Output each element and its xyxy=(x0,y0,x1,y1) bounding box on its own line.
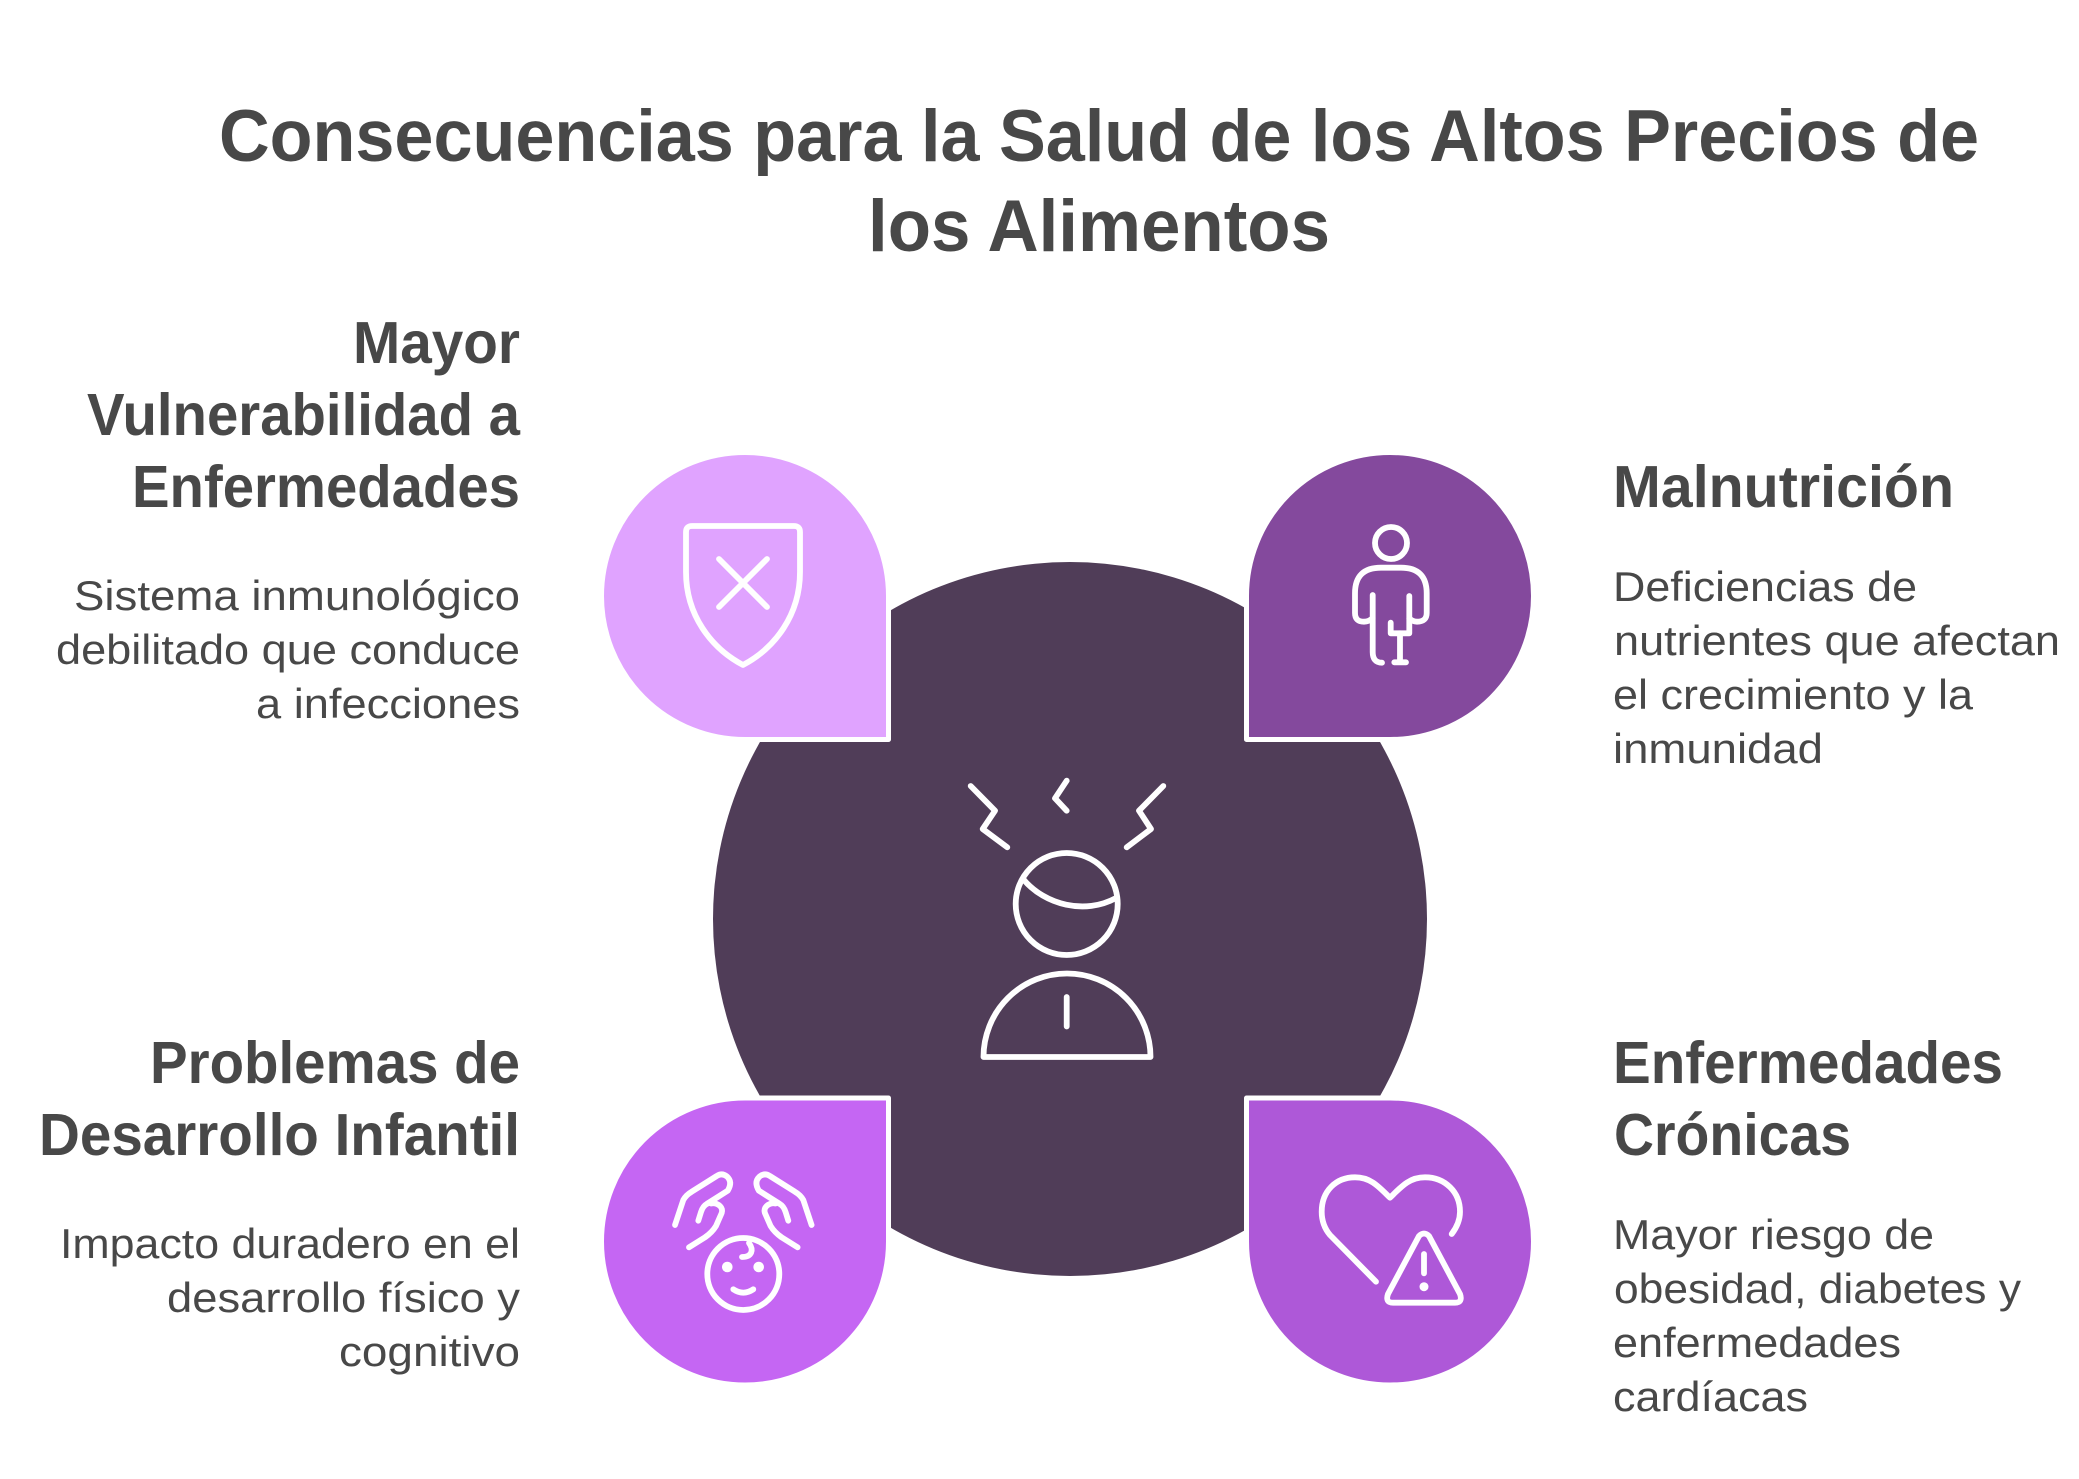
heading: Malnutrición xyxy=(1613,454,1954,520)
teardrop: deep purple xyxy=(1246,452,1534,740)
description: cardíacas xyxy=(1613,1373,1808,1420)
panel: Enfermedades Crónicas xyxy=(1246,1030,2021,1420)
description: el crecimiento y la xyxy=(1613,671,1974,718)
description: Sistema inmunológico xyxy=(74,572,520,619)
title xyxy=(219,96,1979,267)
panel: Malnutrición xyxy=(1246,452,2060,772)
description: Mayor riesgo de xyxy=(1613,1211,1934,1258)
central circle xyxy=(713,562,1427,1276)
title: Consecuencias para la Salud de los Altos Precios de xyxy=(219,96,1979,177)
icon: shield with cross xyxy=(686,526,800,665)
heading: Problemas de xyxy=(150,1030,520,1096)
heading: Enfermedades xyxy=(1613,1030,2003,1096)
icon: heart with warning triangle xyxy=(1322,1177,1461,1303)
description: nutrientes que afectan xyxy=(1614,617,2060,664)
description: a infecciones xyxy=(256,680,520,727)
heading xyxy=(1613,1030,2003,1168)
heading: Mayor xyxy=(353,310,520,376)
description xyxy=(1613,563,2060,772)
icon: person with prosthetic leg xyxy=(1355,527,1427,663)
description xyxy=(60,1220,520,1375)
description: enfermedades xyxy=(1613,1319,1901,1366)
title: los Alimentos xyxy=(868,186,1330,267)
panel: Problemas de Desarrollo Infantil xyxy=(39,1030,888,1385)
heading: Crónicas xyxy=(1614,1102,1851,1168)
description: inmunidad xyxy=(1613,725,1823,772)
teardrop: bright violet xyxy=(602,1098,888,1385)
icon: stressed person xyxy=(971,781,1163,1057)
teardrop: medium purple xyxy=(1246,1098,1534,1385)
description xyxy=(1613,1211,2021,1420)
heading: Vulnerabilidad a xyxy=(87,382,521,448)
heading xyxy=(87,310,521,520)
heading: Desarrollo Infantil xyxy=(39,1102,520,1168)
icon: hands protecting baby xyxy=(675,1174,812,1310)
description: Impacto duradero en el xyxy=(60,1220,520,1267)
heading xyxy=(39,1030,520,1168)
description: Deficiencias de xyxy=(1613,563,1917,610)
teardrop: light lilac xyxy=(602,452,888,740)
heading: Enfermedades xyxy=(132,454,520,520)
description: obesidad, diabetes y xyxy=(1614,1265,2021,1312)
description: desarrollo físico y xyxy=(167,1274,520,1321)
description: cognitivo xyxy=(339,1328,520,1375)
description xyxy=(56,572,520,727)
panel: Mayor Vulnerabilidad a Enfermedades xyxy=(56,310,888,740)
description: debilitado que conduce xyxy=(56,626,520,673)
